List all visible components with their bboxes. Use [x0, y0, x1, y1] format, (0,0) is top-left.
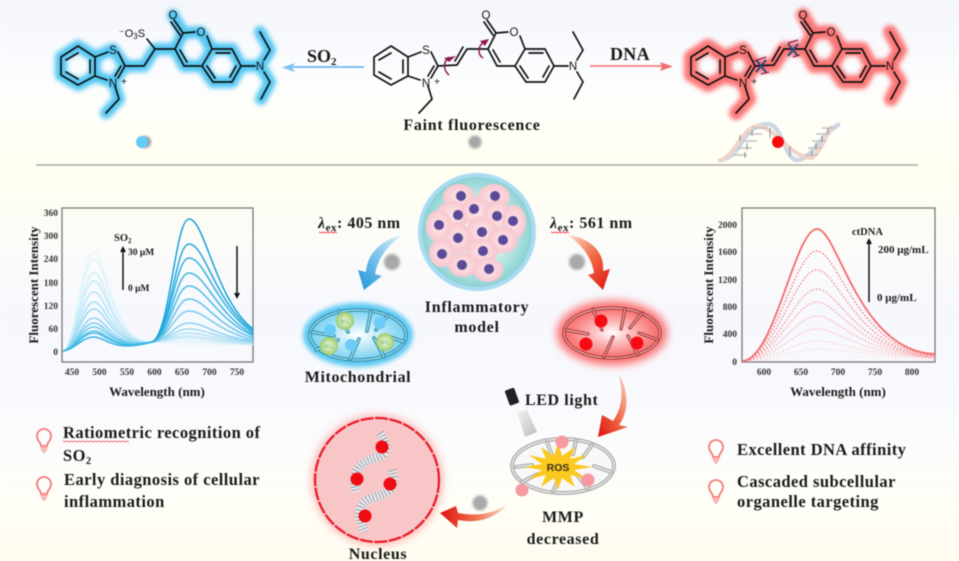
curves: long-wavelength peak — [152, 219, 253, 345]
molecule: free probe, faint fluorescence: O — [510, 27, 519, 39]
y axis ticks: 800 — [723, 303, 737, 313]
x axis ticks: 800 — [905, 368, 919, 378]
DNA strands — [354, 433, 394, 532]
y axis ticks: 1600 — [718, 248, 737, 258]
annotations: 2 — [128, 237, 132, 245]
label: excitation 561 nm — [549, 215, 633, 234]
label: excitation 561 nm: : 561 nm — [569, 215, 633, 232]
bulb icon — [37, 477, 51, 500]
grey dye dot right — [569, 254, 585, 270]
LED light icon and beam: LED light — [525, 392, 598, 409]
inflammatory model: cell dish — [420, 175, 534, 289]
chart: SO2 ratiometric spectra — [26, 208, 253, 399]
label: mitochondrial: Mitochondrial — [305, 369, 411, 386]
arrow: blue to mitochondrion — [358, 235, 402, 290]
label: inflammatory model: Inflammatory — [425, 299, 529, 316]
label: faint fluorescence: Faint fluorescence — [403, 117, 541, 134]
label: excitation 405 nm: λ — [317, 215, 326, 232]
x axis ticks: 550 — [120, 368, 134, 378]
bullet list: right: Cascaded subcellular — [737, 472, 896, 491]
molecule: SO2 adduct with blue fluorescence — [61, 10, 270, 113]
arrow: SO2 reaction: SO — [307, 46, 331, 66]
chart: DNA titration spectra: 0 μg/mL — [877, 292, 917, 304]
arrow: red to mitochondrion — [568, 235, 610, 290]
arrow: SO2 reaction — [282, 46, 364, 72]
bullet list: left: 2 — [86, 456, 92, 467]
chart: SO2 ratiometric spectra: 30 μM — [128, 248, 154, 258]
indicator dot: grey — [468, 136, 482, 148]
ROS burst: ROS — [547, 462, 569, 474]
y axis ticks: 400 — [723, 330, 737, 340]
x axis ticks — [65, 368, 244, 378]
y axis ticks — [44, 209, 58, 358]
y axis ticks: 60 — [48, 325, 58, 335]
label: inflammatory model — [425, 299, 529, 336]
label: excitation 561 nm: λ — [549, 215, 558, 232]
mitochondrion: blue — [303, 303, 413, 367]
x axis ticks: 450 — [65, 368, 79, 378]
nucleus — [312, 415, 442, 545]
SO3 spheres: SO₃ — [341, 319, 350, 325]
dye dots — [324, 317, 386, 351]
molecule: SO2 adduct with blue fluorescence: S — [138, 28, 145, 40]
molecule: DNA-bound probe with red fluorescence: N — [739, 78, 747, 90]
x axis ticks — [757, 368, 919, 378]
molecule: SO2 adduct with blue fluorescence: O — [197, 27, 206, 39]
bullet list: left: Early diagnosis of cellular — [64, 470, 260, 489]
annotations: SO — [114, 233, 128, 244]
SO3 spheres — [320, 312, 394, 355]
bulb icon — [37, 429, 51, 452]
molecule: DNA-bound probe with red fluorescence: O — [799, 10, 808, 22]
molecule: SO2 adduct with blue fluorescence: + — [121, 77, 127, 88]
annotations: ctDNA — [852, 227, 883, 238]
y axis ticks: 0 — [732, 358, 737, 368]
label: MMP decreased: MMP — [542, 509, 584, 526]
molecule: SO2 adduct with blue fluorescence: ⁻O — [119, 28, 133, 40]
arrow: DNA reaction: DNA — [610, 44, 650, 64]
arrow: red mitochondrion to damaged mitochondrion — [598, 375, 628, 437]
molecule: free probe, faint fluorescence — [374, 10, 583, 113]
molecule: free probe, faint fluorescence: + — [434, 77, 440, 88]
chart: DNA titration spectra: 200 μg/mL — [878, 244, 929, 256]
SO3 spheres: SO₃ — [325, 344, 334, 350]
dye dots — [580, 314, 644, 350]
curves: short-wavelength peak — [63, 252, 152, 351]
arrow: to nucleus — [440, 505, 507, 528]
mitochondrion: grey with ROS burst — [512, 436, 614, 496]
bulb icon — [709, 440, 723, 463]
molecule: DNA-bound probe with red fluorescence — [691, 10, 900, 113]
DNA double helix with red dot — [718, 124, 840, 161]
molecule: SO2 adduct with blue fluorescence: 3 — [133, 32, 138, 41]
molecule: SO2 adduct with blue fluorescence: N — [256, 61, 264, 73]
molecule: SO2 adduct with blue fluorescence: N — [109, 78, 117, 90]
released dye dots — [556, 436, 568, 448]
chart: DNA titration spectra — [701, 208, 935, 399]
y axis ticks: 360 — [44, 209, 58, 219]
axis titles: Wavelength (nm) — [109, 384, 205, 399]
x axis ticks: 650 — [175, 368, 189, 378]
x axis ticks: 750 — [868, 368, 882, 378]
x axis ticks: 700 — [831, 368, 845, 378]
y axis ticks: 180 — [44, 279, 58, 289]
axis titles: Wavelength (nm) — [790, 384, 886, 399]
label: excitation 405 nm — [317, 215, 401, 234]
arrow: SO2 reaction: 2 — [331, 56, 337, 68]
y axis ticks: 240 — [44, 255, 58, 265]
label: inflammatory model: model — [454, 319, 500, 336]
molecule: free probe, faint fluorescence: N — [422, 78, 430, 90]
y axis ticks: 120 — [44, 302, 58, 312]
molecule: DNA-bound probe with red fluorescence: O — [827, 27, 836, 39]
LED light icon and beam — [505, 387, 598, 437]
molecule: free probe, faint fluorescence: O — [482, 10, 491, 22]
mitochondrion: red — [557, 301, 667, 365]
label: MMP decreased: decreased — [527, 531, 599, 548]
bullet list: left — [37, 423, 260, 511]
cells — [426, 184, 526, 282]
bound dye dots — [350, 440, 396, 522]
molecule: DNA-bound probe with red fluorescence: N — [886, 61, 894, 73]
chart: SO2 ratiometric spectra: 0 μM — [128, 284, 150, 294]
molecule: free probe, faint fluorescence: N — [569, 61, 577, 73]
bulb icon — [709, 480, 723, 503]
bullet list: right: organelle targeting — [737, 492, 879, 511]
y axis ticks: 300 — [44, 232, 58, 242]
y axis ticks — [718, 221, 737, 368]
chart: DNA titration spectra: Fluorescent Intensity — [701, 226, 716, 344]
nuclei — [434, 191, 518, 274]
grey dye dot left — [384, 254, 400, 270]
arrow: DNA reaction — [590, 44, 673, 71]
label: excitation 561 nm: ex — [558, 222, 569, 234]
curves — [743, 229, 935, 361]
label: excitation 405 nm: ex — [326, 222, 337, 234]
molecule: DNA-bound probe with red fluorescence: + — [751, 77, 757, 88]
x axis ticks: 700 — [202, 368, 217, 378]
bullet list: right: Excellent DNA affinity — [737, 440, 907, 459]
molecule: SO2 adduct with blue fluorescence: S — [109, 45, 117, 57]
label: MMP decreased — [527, 509, 599, 548]
indicator dot: blue — [136, 136, 151, 148]
grey dye dot bottom — [472, 496, 488, 510]
molecule: DNA-bound probe with red fluorescence: S — [739, 45, 747, 57]
bullet list: left: Ratiometric recognition of — [63, 423, 260, 442]
y axis ticks: 2000 — [718, 221, 737, 231]
label: excitation 405 nm: : 405 nm — [337, 215, 401, 232]
x axis ticks: 600 — [757, 368, 771, 378]
x axis ticks: 600 — [147, 368, 162, 378]
bullet list: left: SO — [63, 446, 86, 465]
y axis ticks: 0 — [53, 348, 58, 358]
molecule: free probe, faint fluorescence: S — [422, 45, 430, 57]
molecule: SO2 adduct with blue fluorescence: O — [169, 10, 178, 22]
y axis ticks: 1200 — [718, 276, 737, 286]
bullet list: left: inflammation — [64, 492, 165, 511]
x axis ticks: 750 — [230, 368, 244, 378]
bullet list: right — [709, 440, 907, 511]
chart: SO2 ratiometric spectra: Fluorescent Intensity — [26, 226, 41, 344]
SO3 spheres: SO₃ — [381, 340, 390, 346]
x axis ticks: 500 — [92, 368, 107, 378]
x axis ticks: 650 — [794, 368, 808, 378]
divider — [36, 164, 918, 166]
